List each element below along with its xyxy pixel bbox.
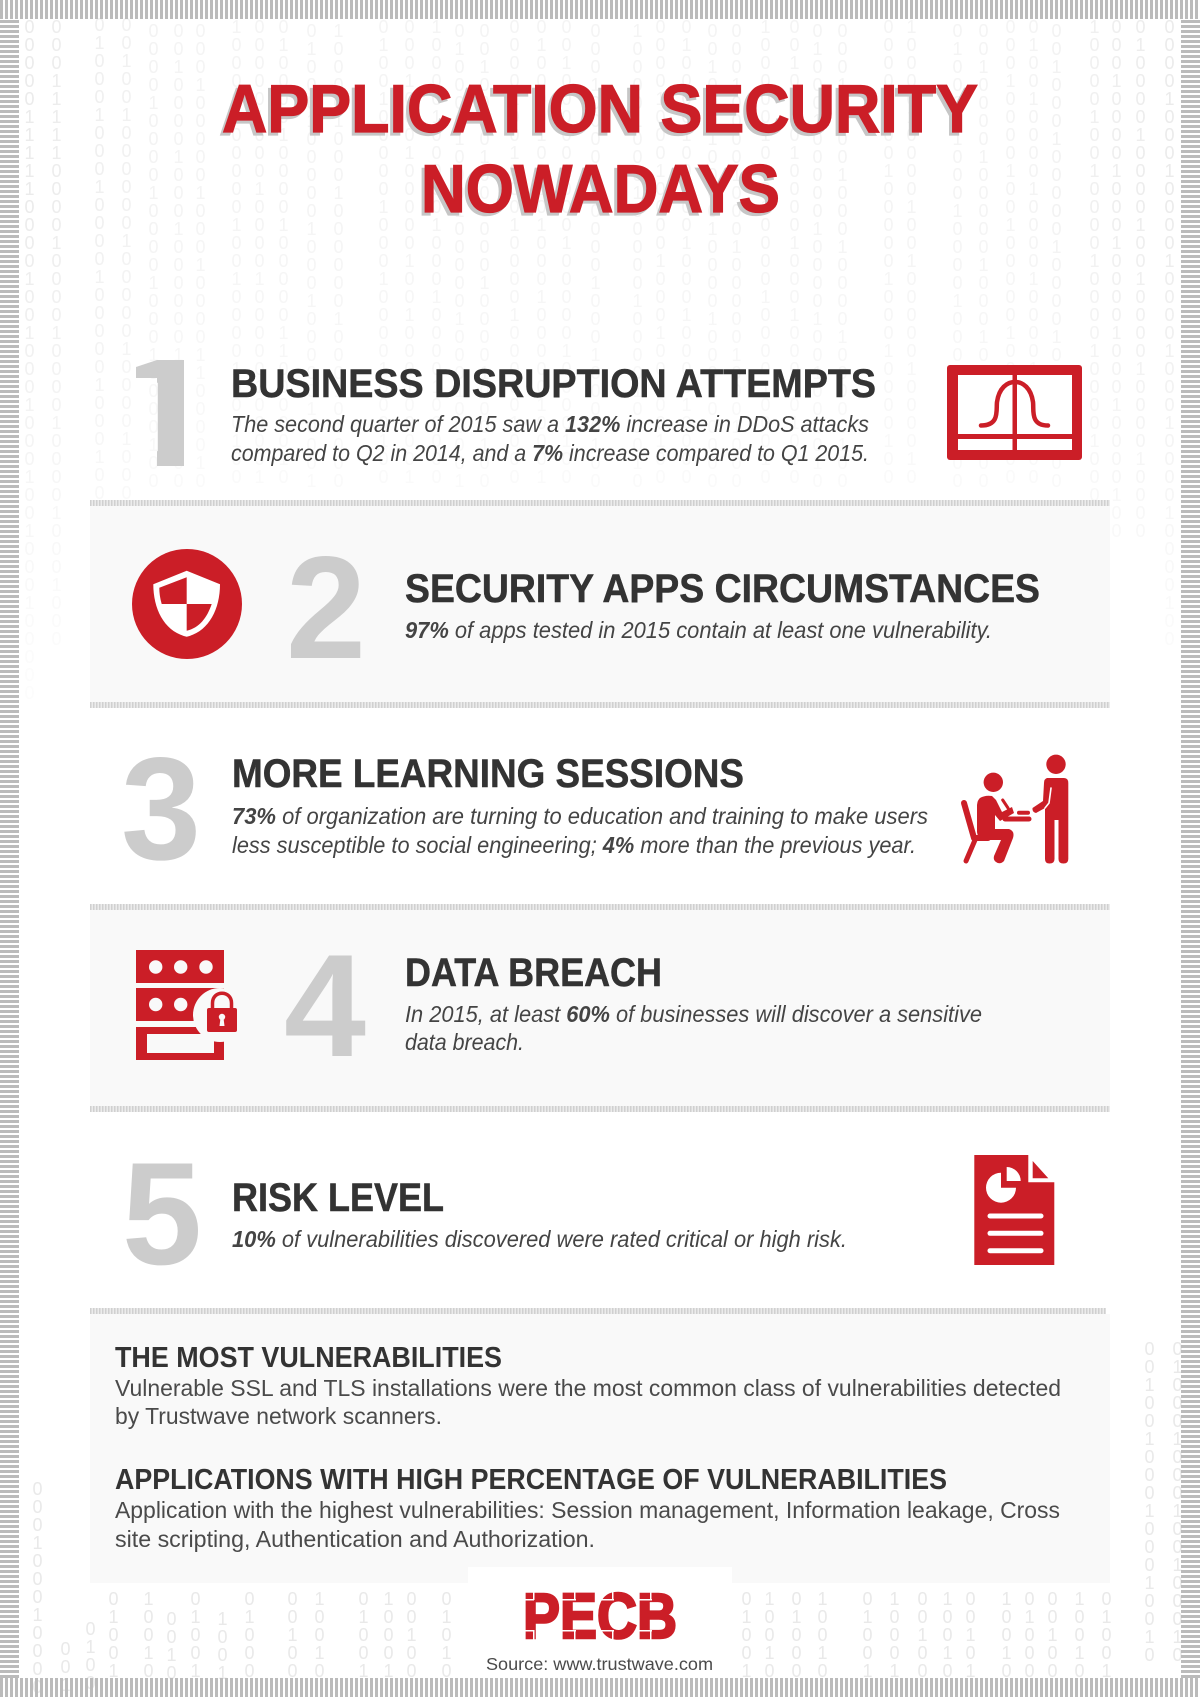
background: binary code pattern: 00010001000001001000100001 (404, 17, 414, 487)
description 4 (405, 1001, 982, 1055)
panel: data breach (90, 904, 1110, 1112)
description 3 (232, 803, 928, 858)
icon: network traffic monitor (947, 365, 1082, 460)
background: binary code pattern: 01001 (741, 1589, 752, 1681)
background: binary code pattern: 01000010000100010000010001 (536, 17, 546, 487)
description 1 (231, 411, 869, 466)
background: binary code pattern: 10000100000100100001000100 (231, 17, 242, 487)
background: binary code pattern: 001001000100010010 (1144, 1339, 1154, 1665)
heading 3: MORE LEARNING SESSIONS (232, 752, 744, 796)
text: applications detail: site scripting, Authentication and Authorization. (115, 1526, 595, 1552)
numeral 2: 2 (286, 526, 366, 689)
background: binary code pattern: 001 (60, 1639, 70, 1695)
text: most vulnerabilities detail: Vulnerable SSL and TLS installations were the most common class of vulnerabilities detected (115, 1375, 1061, 1401)
background: binary code pattern: 00010000100010000100000100 (837, 21, 848, 491)
background: binary code pattern: 00010000100010000010001000 (731, 21, 742, 491)
background: binary code pattern: 01001 (1101, 1589, 1112, 1681)
background: binary code pattern: 00000100010000100000100001 (254, 17, 264, 487)
background: binary code pattern: 00001000010000100010000100 (148, 21, 158, 491)
numeral 1: 1 (107, 334, 228, 497)
background: binary code pattern: 01000 (1024, 1589, 1034, 1681)
background: binary code pattern: 00010000100100000100010000 (1005, 17, 1016, 487)
background: binary code pattern: 01001 (862, 1589, 872, 1681)
background: binary code pattern: 010001000100100010 (1172, 1339, 1182, 1665)
item 5: risk level (122, 1132, 1054, 1295)
background: binary code pattern: 01000010000010001000010000 (681, 17, 692, 487)
background: binary code pattern: 00001001000100001000001000 (509, 17, 520, 487)
background: binary code pattern: 10000100010000001000100000 (333, 21, 344, 491)
description 3: 73% of organization are turning to education and training to make users (232, 803, 928, 829)
description 1: The second quarter of 2015 saw a 132% increase in DDoS attacks (231, 411, 869, 437)
background: binary code pattern: 00001000100001000010001000010000100 (1164, 17, 1174, 649)
background: binary code pattern: 10000100000100010000100000 (431, 17, 442, 487)
description 2: 97% of apps tested in 2015 contain at least one vulnerability. (405, 617, 992, 643)
background: binary code pattern: 10010 (143, 1589, 154, 1681)
background: binary code pattern: 0100 (85, 1619, 96, 1693)
background: binary code pattern: 01001000010000100001000100 (1028, 17, 1038, 487)
icon: report document (974, 1155, 1054, 1265)
background: binary code pattern: 00010000010001000011000010 (195, 21, 206, 491)
text: applications detail: Application with the highest vulnerabilities: Session management, Information leakage, Cross (115, 1497, 1060, 1523)
background: binary code pattern: 00100001000010001000001000 (789, 17, 800, 487)
footer: logo and source (468, 1567, 732, 1678)
heading 1: BUSINESS DISRUPTION ATTEMPTS (231, 362, 876, 406)
background: binary code pattern: 10010 (817, 1589, 828, 1681)
heading: the most vulnerabilities: THE MOST VULNERABILITIES (115, 1342, 502, 1374)
background: binary code pattern: 00100 (1047, 1589, 1058, 1681)
numeral 4: 4 (284, 924, 366, 1087)
source line: Source: www.trustwave.com (486, 1654, 713, 1674)
background: binary code pattern: 0010 (166, 1609, 176, 1683)
numeral 1 (136, 360, 184, 466)
background: binary code pattern: 00100100000010000010000100001 (121, 15, 132, 539)
background: binary code pattern: 10010 (764, 1589, 774, 1681)
background: binary code pattern: 00001000100000100010000100 (883, 17, 894, 487)
background: binary code pattern: 10010 (1001, 1589, 1012, 1681)
background: binary code pattern: 01010 (441, 1589, 452, 1681)
background: binary code pattern: 01001 (190, 1589, 200, 1681)
background: binary code pattern: 00011111000010000100001000010001000 (51, 17, 62, 649)
background: binary code pattern: 00100 (917, 1589, 928, 1681)
background: binary code pattern: 01000100010000100000100010000 (94, 15, 104, 539)
icon: teacher and seated student (964, 755, 1068, 864)
background: binary code pattern: 10001 (383, 1589, 394, 1681)
heading 5: RISK LEVEL (232, 1176, 444, 1220)
text: applications detail (115, 1497, 1060, 1552)
item 3: more learning sessions (121, 727, 1068, 890)
heading 4: DATA BREACH (405, 951, 662, 995)
background: binary code pattern: 01001 (358, 1589, 368, 1681)
background: binary code pattern: 10000010001000010000100010 (760, 17, 770, 487)
background: binary code pattern: 00100 (406, 1589, 416, 1681)
background: binary code pattern: 1001 (217, 1609, 228, 1683)
background: binary code pattern: 01001 (108, 1589, 118, 1681)
numeral 3: 3 (121, 727, 201, 890)
background: binary code pattern: 01000 (244, 1589, 254, 1681)
background: binary code pattern: 00100001000001000100001000 (978, 21, 988, 491)
background: binary code pattern: 00100010000010000100010000 (1051, 21, 1062, 491)
background: binary code pattern: 01000100000100001001000010 (812, 21, 822, 491)
title (222, 71, 978, 227)
background: binary code pattern: 10001 (889, 1589, 900, 1681)
background: binary code pattern: 01000010000100100001000010000 (1135, 17, 1146, 541)
background: binary code pattern: 00100000100010000010000100 (561, 17, 572, 487)
background: binary code pattern: 00100 (287, 1589, 298, 1681)
background: binary code pattern: 01000010001000010000010000 (952, 21, 962, 491)
background: binary code pattern: 01000 (791, 1589, 802, 1681)
background: binary code pattern: 10010 (942, 1589, 952, 1681)
description 3: less susceptible to social engineering; 4% more than the previous year. (232, 832, 916, 858)
background: binary code pattern: 10000100010000010000100010 (632, 21, 642, 491)
background: binary code pattern: 01000100000100010000010001 (306, 21, 316, 491)
description 4: In 2015, at least 60% of businesses will discover a sensitive (405, 1001, 982, 1027)
logo: PECB: PECB (523, 1580, 677, 1652)
background: binary code pattern: 000100010000 (32, 1479, 42, 1697)
icon: shield (132, 549, 242, 659)
background: binary code pattern: 01000010000100000110000010 (278, 17, 288, 487)
background: binary code pattern: 01000010001000001000100001 (454, 21, 464, 491)
text: most vulnerabilities detail: by Trustwave network scanners. (115, 1403, 442, 1429)
background: binary code pattern: 00010000100010000100010000100 (1111, 17, 1122, 541)
description 4: data breach. (405, 1029, 524, 1055)
background: binary code pattern: 10000100001001000001000010 (906, 17, 916, 487)
background: binary code pattern: 00001000100001000100000100 (655, 17, 666, 487)
description 5: 10% of vulnerabilities discovered were rated critical or high risk. (232, 1226, 847, 1252)
background: binary code pattern: 10010 (1074, 1589, 1084, 1681)
heading: applications with high percentage: APPLICATIONS WITH HIGH PERCENTAGE OF VULNERABILITIES (115, 1464, 947, 1496)
panel: vulnerabilities notes (90, 1308, 1110, 1583)
heading 2: SECURITY APPS CIRCUMSTANCES (405, 567, 1040, 611)
item 1: business disruption attempts (136, 360, 1082, 466)
background: binary code pattern: 00101 (965, 1589, 976, 1681)
numeral 5: 5 (122, 1132, 202, 1295)
title: APPLICATION SECURITY (222, 71, 978, 147)
background: binary code pattern: 00000111110000100100010001001000100000 (24, 17, 34, 703)
background: binary code pattern: 10000100100001000010000100001000 (1089, 17, 1100, 595)
background: binary code pattern: 01001000001000100001000100 (378, 17, 388, 487)
title: NOWADAYS (421, 151, 780, 227)
background: binary code pattern: 00100010000100001000100000 (707, 21, 718, 491)
background: binary code pattern: 00100001000000100001000100 (479, 21, 490, 491)
text: most vulnerabilities detail (115, 1375, 1061, 1429)
description 1: compared to Q2 in 2014, and a 7% increase compared to Q1 2015. (231, 440, 869, 466)
icon: server with padlock (136, 950, 247, 1060)
panel: security apps circumstances (90, 500, 1110, 708)
background: binary code pattern: 00100001000100000010000100 (173, 21, 184, 491)
background: binary code pattern: 10010 (314, 1589, 324, 1681)
background: binary code pattern: 00010000100000100010000100 (590, 21, 600, 491)
